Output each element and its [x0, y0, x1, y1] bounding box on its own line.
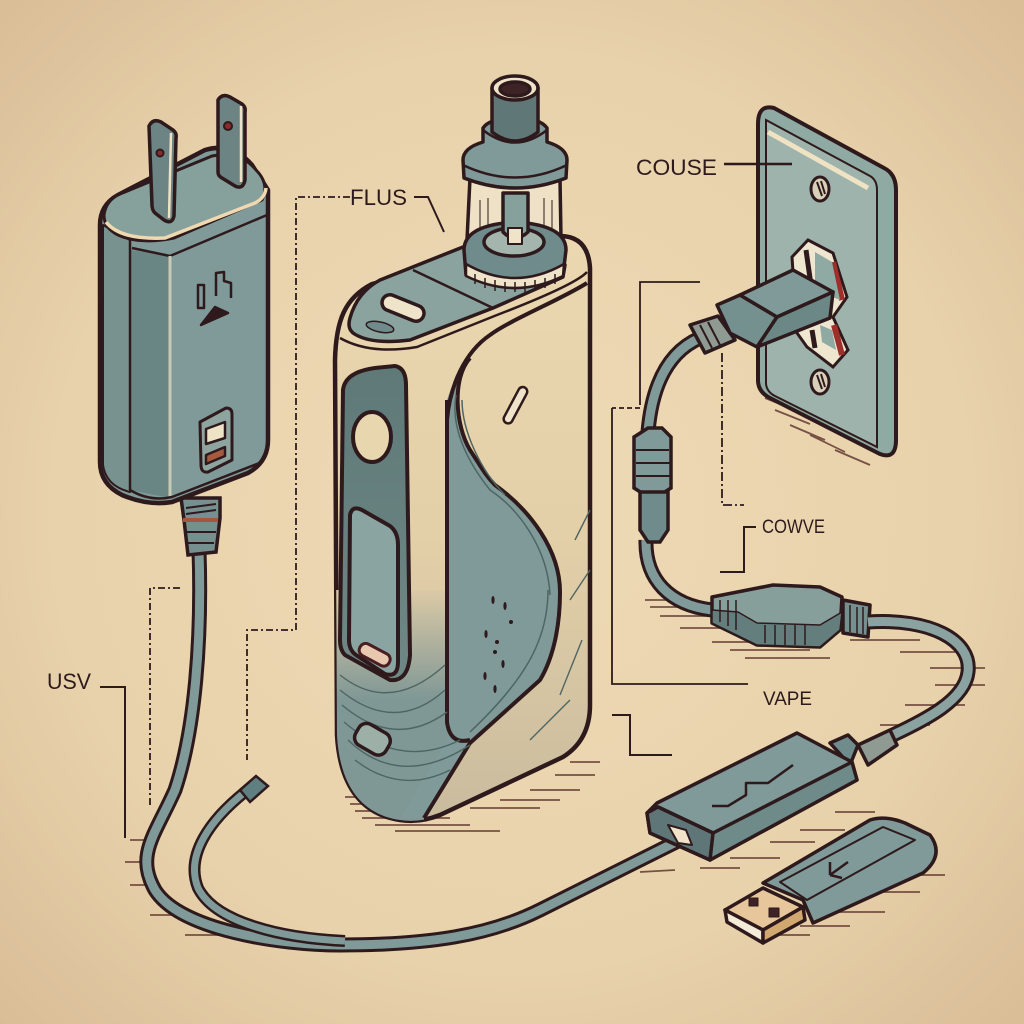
vape small button [351, 720, 394, 758]
strain relief [634, 428, 671, 542]
label: USV: USV [47, 669, 91, 694]
vape control panel [340, 366, 410, 680]
vape lower left grey [336, 590, 447, 821]
vape top slot [380, 292, 426, 324]
outlet screw bottom [811, 370, 829, 394]
charger cable [147, 498, 680, 945]
vape top [349, 247, 565, 341]
vape body [335, 236, 590, 821]
vape texture arcs [340, 510, 590, 780]
outlet screw top [811, 177, 829, 201]
label: USV [47, 669, 125, 838]
icon: wall outlet [758, 107, 896, 455]
charger glyph [198, 272, 231, 325]
cable to USB dongle [868, 622, 968, 735]
vape inner wave line [447, 400, 470, 741]
vape tank and mouthpiece [463, 76, 567, 292]
label: FLUS: FLUS [350, 185, 407, 210]
label: VAPE: VAPE [763, 689, 812, 710]
label: COWVE: COWVE [762, 517, 825, 538]
vape grey side wave [400, 358, 560, 818]
vape fire button [353, 412, 391, 462]
label: FLUS [350, 185, 444, 232]
icon: vape device [330, 76, 590, 830]
dashed leader lines [150, 197, 748, 805]
label: VAPE [612, 689, 812, 755]
label: COUSE: COUSE [636, 155, 717, 180]
icon: cable to outlet with plug and inline module [634, 270, 870, 647]
plug head [690, 270, 833, 353]
outlet socket [792, 240, 848, 367]
label: COWVE [720, 517, 825, 572]
icon: USB dongle [647, 730, 897, 860]
icon: USB stick [725, 818, 936, 943]
vape slot and dots [502, 385, 529, 425]
prongs [149, 96, 245, 222]
vape screen [349, 508, 398, 675]
inline module [712, 585, 870, 647]
charger top face [104, 155, 265, 241]
icon: main wall charger [100, 96, 268, 503]
hatching shadows [125, 398, 985, 935]
charger port [200, 408, 232, 472]
